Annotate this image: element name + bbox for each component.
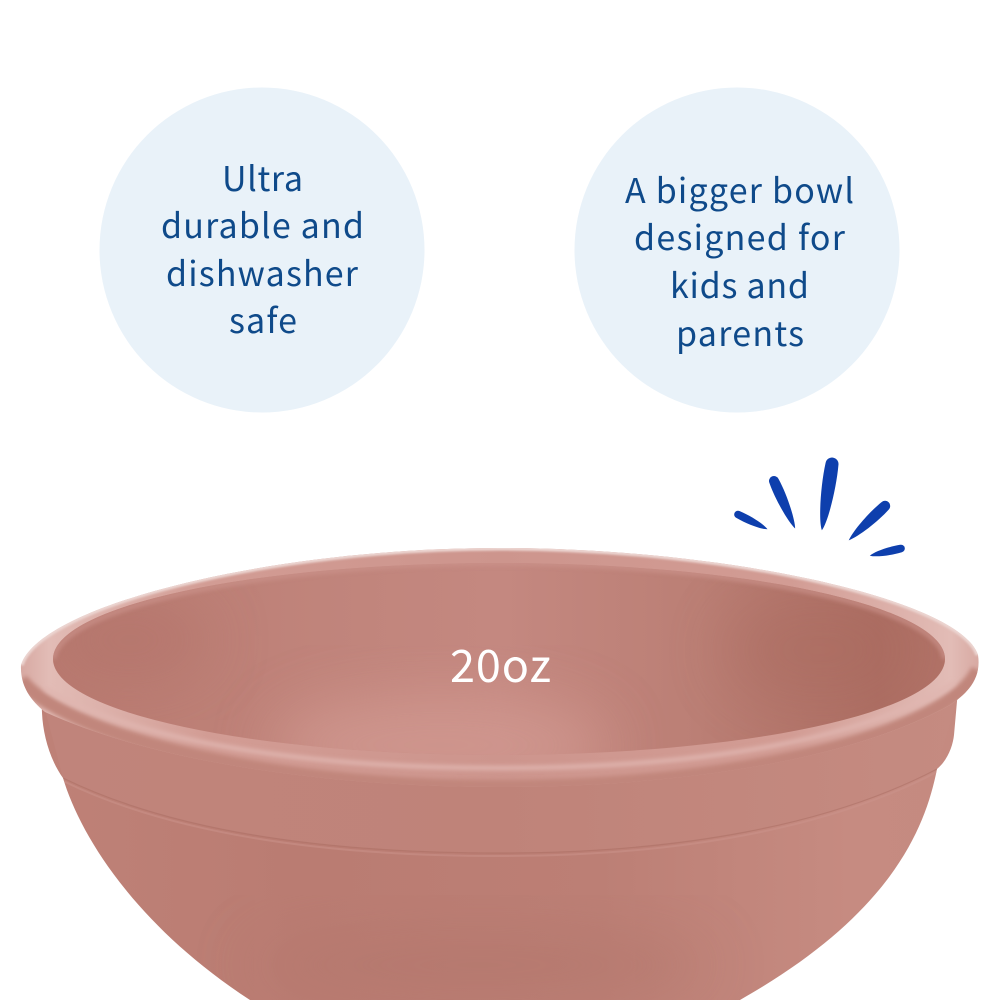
capacity label: 20oz [450, 630, 551, 695]
feature circle: durable: safe [229, 294, 297, 343]
feature circle: durable [100, 88, 424, 412]
feature circle: bigger bowl: parents [676, 307, 804, 356]
feature circle: bigger bowl: designed for [634, 211, 846, 260]
feature circle: durable: Ultra [222, 152, 303, 201]
icon: sparkle burst [733, 457, 906, 560]
bowl rim [15, 545, 985, 790]
feature circle: bigger bowl: kids and [670, 259, 809, 308]
bowl [0, 545, 1000, 1000]
feature circle: bigger bowl [574, 88, 900, 412]
feature circle: bigger bowl: A bigger bowl [625, 164, 854, 213]
feature circle: durable: durable and [161, 199, 364, 248]
bowl body [42, 700, 958, 1000]
bowl interior [53, 563, 945, 754]
feature circle: durable: dishwasher [166, 247, 359, 296]
